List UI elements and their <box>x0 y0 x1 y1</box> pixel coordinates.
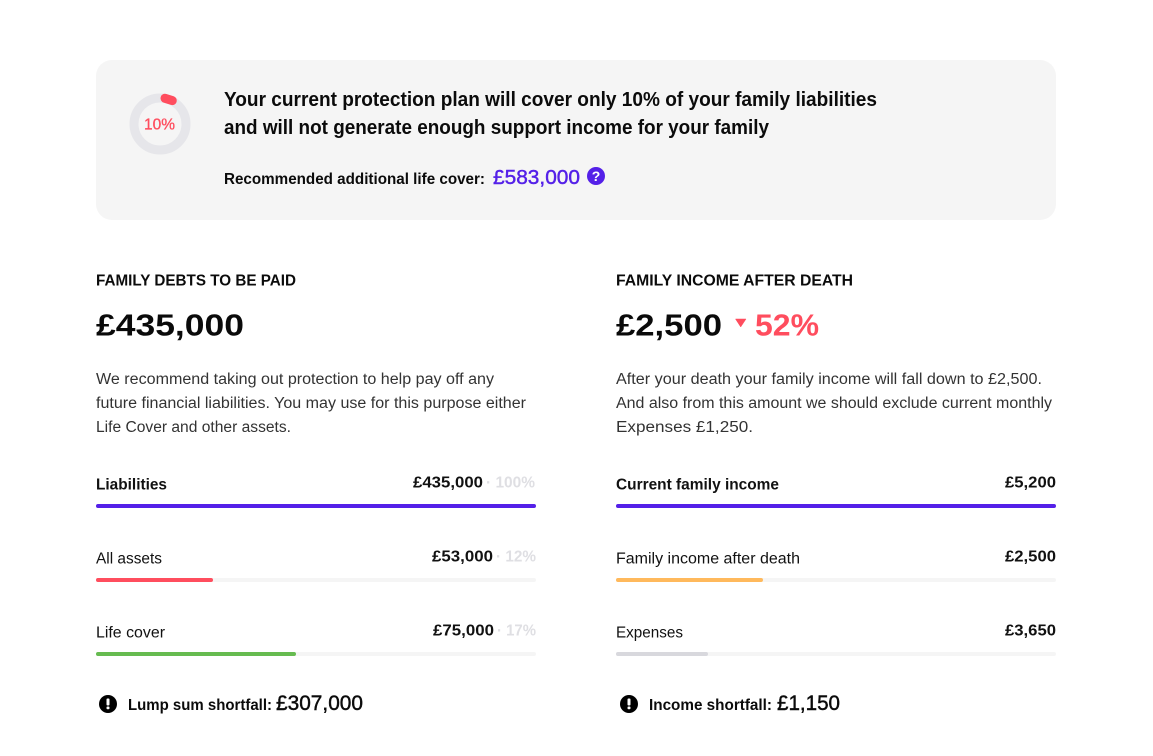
income total: £2,500 <box>616 308 722 342</box>
income description <box>616 371 1052 436</box>
income description: Expenses £1,250. <box>616 419 753 436</box>
row: all assets: All assets <box>96 550 162 568</box>
row: all assets <box>96 548 536 582</box>
row: life cover: · 17% <box>497 622 536 640</box>
debts description: future financial liabilities. You may use for this purpose either <box>96 395 526 412</box>
heading: family income: FAMILY INCOME AFTER DEATH <box>616 272 853 290</box>
row: expenses: Expenses <box>616 624 683 642</box>
income description: After your death your family income will fall down to £2,500. <box>616 371 1042 388</box>
row: current family income <box>616 474 1056 508</box>
row: liabilities: · 100% <box>486 474 535 492</box>
headline: Your current protection plan will cover only 10% of your family liabilities <box>224 89 877 111</box>
icon: 10% progress ring: 10% <box>144 116 175 134</box>
lump sum shortfall <box>99 692 363 715</box>
row: all assets: · 12% <box>496 548 536 566</box>
icon: alert <box>620 695 638 713</box>
row: family income after death: Family income after death <box>616 550 800 568</box>
row: liabilities: £435,000 <box>413 474 483 492</box>
row: expenses: £3,650 <box>1005 622 1056 640</box>
debts description: Life Cover and other assets. <box>96 419 291 436</box>
panel: family income <box>616 272 1056 715</box>
headline <box>224 89 877 139</box>
panel: family debts <box>96 272 536 715</box>
row: family income after death: £2,500 <box>1005 548 1056 566</box>
debts description <box>96 371 526 436</box>
icon: 10% progress ring <box>134 98 186 150</box>
recommended additional life cover: £583,000 <box>493 167 580 189</box>
percent drop: 52% <box>755 308 819 342</box>
row: family income after death <box>616 548 1056 582</box>
summary panel <box>96 60 1056 220</box>
debts description: We recommend taking out protection to help pay off any <box>96 371 494 388</box>
lump sum shortfall: Lump sum shortfall: <box>128 697 272 714</box>
debts total: £435,000 <box>96 308 244 342</box>
icon: down triangle <box>736 319 746 327</box>
row: current family income: £5,200 <box>1005 474 1056 492</box>
income shortfall: Income shortfall: <box>649 697 772 714</box>
lump sum shortfall: £307,000 <box>276 692 363 715</box>
row: life cover <box>96 622 536 656</box>
recommended additional life cover <box>224 167 605 189</box>
recommended additional life cover: Recommended additional life cover: <box>224 171 485 188</box>
icon: help: ? <box>592 168 600 184</box>
icon: help <box>587 167 605 185</box>
headline: and will not generate enough support income for your family <box>224 117 770 139</box>
icon: alert <box>99 695 117 713</box>
income description: And also from this amount we should exclude current monthly <box>616 395 1052 412</box>
income shortfall: £1,150 <box>777 692 840 715</box>
row: life cover: £75,000 <box>433 622 494 640</box>
row: expenses <box>616 622 1056 656</box>
row: current family income: Current family income <box>616 476 779 494</box>
row: all assets: £53,000 <box>432 548 493 566</box>
income shortfall <box>620 692 840 715</box>
row: life cover: Life cover <box>96 624 165 642</box>
row: liabilities: Liabilities <box>96 476 167 494</box>
row: liabilities <box>96 474 536 508</box>
heading: family debts: FAMILY DEBTS TO BE PAID <box>96 272 296 290</box>
